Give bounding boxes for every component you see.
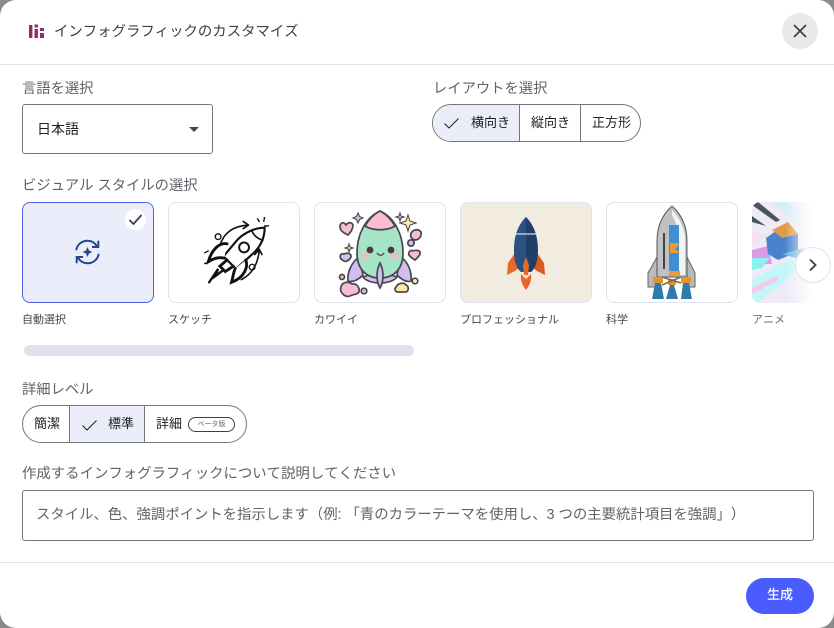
caption: kawaii: カワイイ [314, 314, 358, 326]
detail segmented control: ベータ版 [198, 421, 226, 428]
layout segmented control: 正方形 [592, 115, 631, 130]
style card: science [606, 202, 738, 303]
detail label: 詳細レベル [22, 382, 93, 398]
detail segmented control [22, 405, 247, 443]
style card: auto [22, 202, 154, 303]
style card: kawaii [314, 202, 446, 303]
description input [22, 490, 814, 541]
header icon [29, 24, 44, 38]
description input: スタイル、色、強調ポイントを指示します（例: 「青のカラーテーマを使用し、3 つの主要統計項目を強調」） [36, 507, 745, 523]
layout segmented control: 縦向き [531, 115, 570, 130]
caption: auto: 自動選択 [22, 314, 66, 326]
caption: sketch: スケッチ [168, 314, 212, 326]
language select: 日本語 [37, 121, 79, 137]
caption: science: 科学 [606, 314, 628, 326]
scrollbar [24, 345, 414, 356]
style card: anime [752, 202, 818, 303]
language label: 言語を選択 [22, 81, 93, 97]
title: インフォグラフィックのカスタマイズ [54, 24, 299, 40]
detail segmented control: 標準 [108, 416, 134, 431]
style card: professional [460, 202, 592, 303]
style card: sketch [168, 202, 300, 303]
detail segmented control: 簡潔 [34, 416, 60, 431]
close button [782, 13, 818, 49]
caption: professional: プロフェッショナル [460, 314, 559, 326]
description label: 作成するインフォグラフィックについて説明してください [22, 466, 396, 482]
next arrow button [795, 247, 831, 283]
generate button: 生成 [767, 587, 793, 602]
layout segmented control: 横向き [471, 115, 510, 130]
layout segmented control [432, 104, 641, 142]
caption: anime: アニメ [752, 314, 785, 326]
style label: ビジュアル スタイルの選択 [22, 178, 198, 194]
language select [22, 104, 213, 154]
generate button [746, 578, 814, 614]
layout label: レイアウトを選択 [433, 81, 547, 97]
detail segmented control: 詳細 [156, 416, 182, 431]
